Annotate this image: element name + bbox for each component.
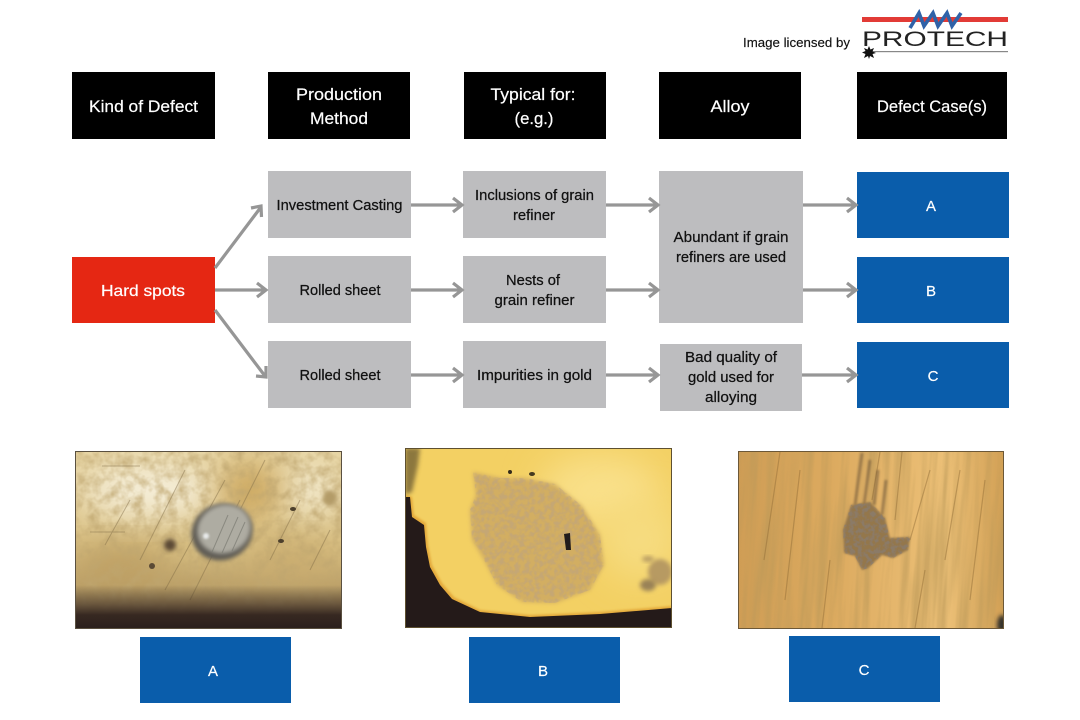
box: Hard spots: Hard spots [101, 283, 185, 300]
box: Impurities in gold: Impurities in gold [477, 368, 592, 384]
arrow: hard spots to rolled sheet row 3 [215, 310, 266, 377]
arrow: row 1 typical to alloy [606, 198, 658, 212]
label box: B [469, 637, 620, 703]
case box: C [857, 342, 1009, 408]
header: Production Method: Production [296, 85, 382, 104]
case box: B [857, 257, 1009, 323]
arrow: row 2 typical to alloy [606, 283, 658, 297]
arrow: hard spots to rolled sheet row 2 [215, 283, 266, 297]
header: Production Method: Method [310, 109, 368, 128]
logo: Protech [862, 13, 1008, 59]
box: Inclusions of grain refiner: refiner [513, 208, 555, 224]
box: Rolled sheet row 2: Rolled sheet [300, 283, 380, 299]
photo C: impurity on gold surface [738, 451, 1004, 629]
logo: Protech: PROTECH [862, 28, 1008, 51]
case box: A: A [926, 198, 936, 215]
box: Abundant if grain refiners are used [659, 171, 803, 323]
photo B: nest of grain refiner [405, 448, 680, 628]
label box: C [789, 636, 940, 702]
box: Abundant if grain refiners are used: Abundant if grain [674, 230, 788, 246]
box: Abundant if grain refiners are used: refiners are used [676, 250, 786, 266]
box: Inclusions of grain refiner [463, 171, 606, 238]
arrow: alloy to case A [803, 198, 856, 212]
arrow: row 3 typical to alloy [606, 368, 658, 382]
label box: C: C [859, 662, 870, 679]
box: Investment Casting: Investment Casting [276, 198, 402, 214]
box: Nests of grain refiner [463, 256, 606, 323]
arrow: row 3 production to typical [411, 368, 462, 382]
photo A: hard spot on scratched surface [70, 451, 342, 629]
case box: C: C [928, 368, 939, 385]
label box: A [140, 637, 291, 703]
arrow: hard spots to investment casting [215, 206, 262, 268]
arrow: row 2 production to typical [411, 283, 462, 297]
header: Typical for [464, 72, 606, 139]
box: Nests of grain refiner: Nests of [506, 273, 561, 289]
case box: B: B [926, 283, 936, 300]
header: Alloy: Alloy [710, 97, 750, 116]
box: Hard spots [72, 257, 215, 323]
header: Typical for: Typical for: [490, 85, 576, 104]
header: Production Method [268, 72, 410, 139]
header: Kind of Defect [72, 72, 215, 139]
box: Rolled sheet row 3 [268, 341, 411, 408]
header: Alloy [659, 72, 801, 139]
header: Defect Case(s) [857, 72, 1007, 139]
arrow: alloy to case C [802, 368, 856, 382]
label box: B: B [538, 663, 548, 680]
box: Bad quality of gold used for alloying [660, 344, 802, 411]
arrow: alloy to case B [803, 283, 856, 297]
label box: A: A [208, 663, 218, 680]
box: Nests of grain refiner: grain refiner [494, 293, 575, 309]
header: Typical for: (e.g.) [514, 109, 554, 128]
attribution: image licensed by: Image licensed by [743, 35, 851, 50]
header: Defect Case(s): Defect Case(s) [877, 97, 987, 116]
box: Rolled sheet row 3: Rolled sheet [300, 368, 380, 384]
box: Inclusions of grain refiner: Inclusions of grain [475, 188, 594, 204]
box: Bad quality of gold used for alloying: alloying [705, 390, 757, 406]
box: Bad quality of gold used for alloying: gold used for [688, 370, 774, 386]
box: Bad quality of gold used for alloying: Bad quality of [685, 350, 778, 366]
header: Kind of Defect: Kind of Defect [89, 97, 198, 116]
box: Investment Casting [268, 171, 411, 238]
box: Rolled sheet row 2 [268, 256, 411, 323]
case box: A [857, 172, 1009, 238]
arrow: row 1 production to typical [411, 198, 462, 212]
box: Impurities in gold [463, 341, 606, 408]
